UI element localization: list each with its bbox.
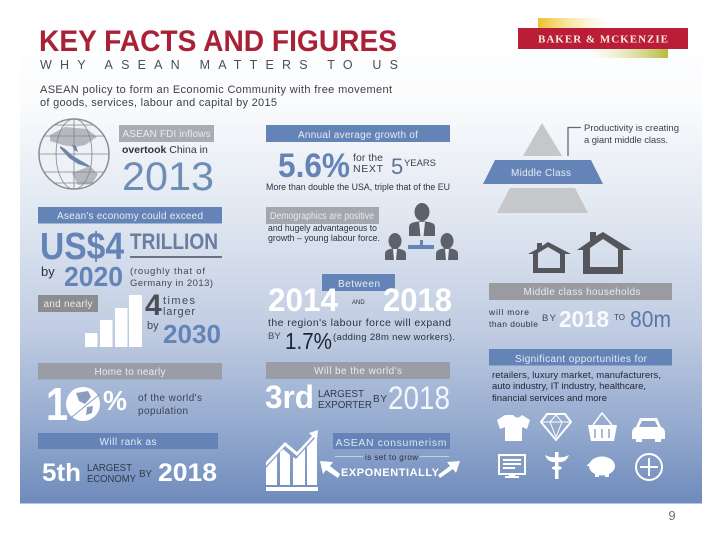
- panel: middle class pyramid: [483, 123, 679, 213]
- text: by 1.7%: (adding 28m new workers).: [333, 332, 455, 343]
- text: trillion: TRILLION: [130, 229, 218, 254]
- shape: middle class: [483, 160, 603, 184]
- text: 5 years: [391, 154, 436, 179]
- text: 3rd largest exporter by 2018: LARGEST: [318, 389, 364, 400]
- icon: piggy bank: [587, 456, 615, 477]
- text: 5th largest economy by 2018: 2018: [158, 459, 217, 487]
- heading: economy could exceed: Asean's economy could exceed: [57, 211, 203, 222]
- heading: Middle class households: Middle class households: [524, 287, 640, 298]
- shape: top: [523, 123, 562, 156]
- panel: labour force: [268, 274, 455, 354]
- text: sector list: financial services and more: [492, 393, 607, 404]
- panel: FDI: [119, 125, 214, 199]
- heading: Will be the world's: Will be the world's: [314, 366, 402, 377]
- text: overtook China in: overtook China in: [122, 144, 208, 156]
- heading: Between: [322, 274, 395, 291]
- page number: 9: [668, 508, 676, 523]
- text: 5th largest economy by 2018: 5th: [42, 459, 81, 487]
- intro text: of goods, services, labour and capital by 2015: [40, 97, 277, 109]
- panel: population: [38, 363, 222, 430]
- panel: households: [488, 232, 672, 332]
- label: and nearly: and nearly: [44, 299, 92, 310]
- heading: economy could exceed: [38, 207, 222, 224]
- text: sector list: [492, 370, 661, 404]
- logo: Baker & McKenzie: BAKER & MCKENZIE: [538, 34, 668, 46]
- icon: plus circle: [636, 454, 662, 480]
- text: 3rd largest exporter by 2018: 2018: [388, 380, 450, 416]
- panel: opportunities: [489, 349, 672, 480]
- text: productivity: Productivity is creating: [584, 123, 679, 134]
- text: 5th largest economy by 2018: ECONOMY: [87, 474, 136, 485]
- text: 3rd largest exporter by 2018: EXPORTER: [318, 400, 372, 411]
- panel: exporter: [265, 362, 450, 416]
- icon: basket: [588, 413, 617, 441]
- text: productivity: a giant middle class.: [584, 135, 668, 146]
- icon: caduceus: [545, 452, 569, 479]
- subtitle: WHY ASEAN MATTERS TO US: [40, 58, 398, 72]
- logo: Baker & McKenzie: [518, 18, 688, 58]
- text: of the world's population: [138, 393, 202, 417]
- text: comparison: More than double the USA, triple that of the EU: [266, 182, 450, 192]
- text: advantageous: growth – young labour force.: [268, 233, 380, 243]
- panel: economy: [38, 207, 222, 349]
- text: by 1.7%: BY: [268, 331, 281, 342]
- bar chart: [85, 295, 142, 347]
- heading: Demographics: [266, 207, 379, 224]
- icon: computer: [499, 455, 525, 478]
- number: 10%: [46, 378, 127, 430]
- number: 2014: 2014: [268, 282, 338, 318]
- text: advantageous: [268, 223, 380, 243]
- text: is set to grow: [335, 453, 449, 462]
- heading: Will rank as: [38, 433, 218, 449]
- panel: consumerism: [266, 430, 460, 491]
- icon: globe: [39, 119, 109, 189]
- text: sector list: auto industry, IT industry, healthcare,: [492, 381, 646, 392]
- text: by 2020: by: [41, 264, 55, 279]
- heading: Annual average growth of: [266, 125, 450, 142]
- heading: Significant opportunities for: [489, 349, 672, 366]
- heading: Will be the world's: [266, 362, 450, 379]
- shape: middle class: Middle Class: [511, 168, 571, 179]
- heading: Between: Between: [338, 279, 380, 290]
- icon: small house: [528, 242, 571, 273]
- text: Germany note: Germany in 2013): [130, 278, 213, 289]
- text: 4 times larger: times: [163, 295, 196, 307]
- number: 10%: %: [103, 385, 127, 416]
- icon: diamond: [541, 414, 571, 440]
- heading: ASEAN FDI inflows: ASEAN FDI inflows: [122, 129, 210, 140]
- text: for the next: [353, 152, 384, 175]
- text: Germany note: [130, 266, 213, 289]
- intro text: [40, 84, 392, 109]
- panel: growth: [266, 125, 450, 192]
- heading: Will rank as: Will rank as: [100, 437, 156, 448]
- text: labour force expands: the region's labour force will expand: [268, 317, 451, 329]
- arrow: left: [320, 461, 340, 478]
- heading: Home to nearly: [38, 363, 222, 380]
- heading: ASEAN consumerism: ASEAN consumerism: [336, 437, 447, 449]
- text: 3rd largest exporter by 2018: BY: [373, 394, 387, 405]
- text: of the world's population: population: [138, 406, 188, 417]
- label: and nearly: [38, 295, 98, 312]
- text: 4 times larger: [145, 289, 196, 322]
- text: by 2018 to 80m: BY: [542, 313, 557, 324]
- text: 5th largest economy by 2018: [42, 459, 217, 487]
- text: by 1.7%: [268, 328, 455, 354]
- heading: Home to nearly: Home to nearly: [94, 367, 166, 378]
- number: 10%: 1: [46, 378, 68, 430]
- text: 3rd largest exporter by 2018: 3rd: [265, 379, 314, 415]
- number: 5.6%: 5.6%: [278, 147, 350, 185]
- heading: Annual average growth of: Annual average growth of: [298, 130, 418, 141]
- text: sector list: retailers, luxury market, manufacturers,: [492, 370, 661, 381]
- icon: large house: [577, 232, 632, 274]
- shape: bottom: [497, 188, 588, 213]
- text: by 2020: 2020: [64, 261, 123, 292]
- icon: business people: [385, 203, 458, 260]
- text: is set to grow: is set to grow: [365, 453, 418, 462]
- text: 5 years: 5: [391, 154, 403, 179]
- text: by 2030: 2030: [163, 319, 221, 349]
- icon: car: [632, 418, 665, 442]
- text: of the world's population: of the world's: [138, 393, 202, 404]
- title: KEY FACTS AND FIGURES: [39, 25, 397, 58]
- text: 5th largest economy by 2018: LARGEST: [87, 463, 132, 474]
- text: by 2018 to 80m: [542, 306, 671, 332]
- number: US$4: US$4: [40, 226, 124, 268]
- panel: rank: [38, 433, 218, 487]
- text: 5 years: YEARS: [404, 158, 436, 169]
- text: exponentially: EXPONENTIALLY: [341, 467, 440, 479]
- text: advantageous: and hugely advantageous to: [268, 223, 377, 233]
- leader line: [568, 128, 581, 156]
- panel: demographics: [266, 203, 458, 260]
- heading: Significant opportunities for: Significant opportunities for: [515, 354, 648, 365]
- text: by 2018 to 80m: 80m: [630, 306, 671, 332]
- icon: t-shirt: [497, 415, 530, 441]
- text: by 2020: [41, 261, 123, 292]
- intro text: ASEAN policy to form an Economic Community with free movement: [40, 84, 392, 96]
- text: productivity: [584, 123, 679, 146]
- text: by 1.7%: 1.7%: [285, 328, 332, 354]
- text: by 2030: by: [147, 320, 159, 332]
- number: 2018: 2018: [383, 282, 452, 318]
- text: will more than double: [488, 307, 538, 329]
- text: and: AND: [352, 300, 365, 306]
- icon: rising chart: [266, 430, 318, 491]
- text: for the next: for the: [353, 152, 383, 164]
- heading: Demographics: Demographics are positive: [270, 211, 374, 222]
- text: by 2018 to 80m: TO: [614, 313, 625, 322]
- text: Germany note: (roughly that of: [130, 266, 205, 277]
- text: will more than double: will more: [488, 307, 529, 317]
- text: 4 times larger: 4: [145, 289, 162, 322]
- text: 4 times larger: larger: [163, 306, 195, 318]
- text: 3rd largest exporter by 2018: [265, 379, 450, 416]
- text: 5th largest economy by 2018: BY: [139, 469, 152, 480]
- number: 2013: 2013: [122, 155, 214, 199]
- text: for the next: NEXT: [353, 163, 384, 175]
- text: will more than double: than double: [489, 319, 538, 329]
- heading: Middle class households: [489, 283, 672, 300]
- text: by 2018 to 80m: 2018: [559, 306, 609, 332]
- arrow: right: [438, 461, 460, 478]
